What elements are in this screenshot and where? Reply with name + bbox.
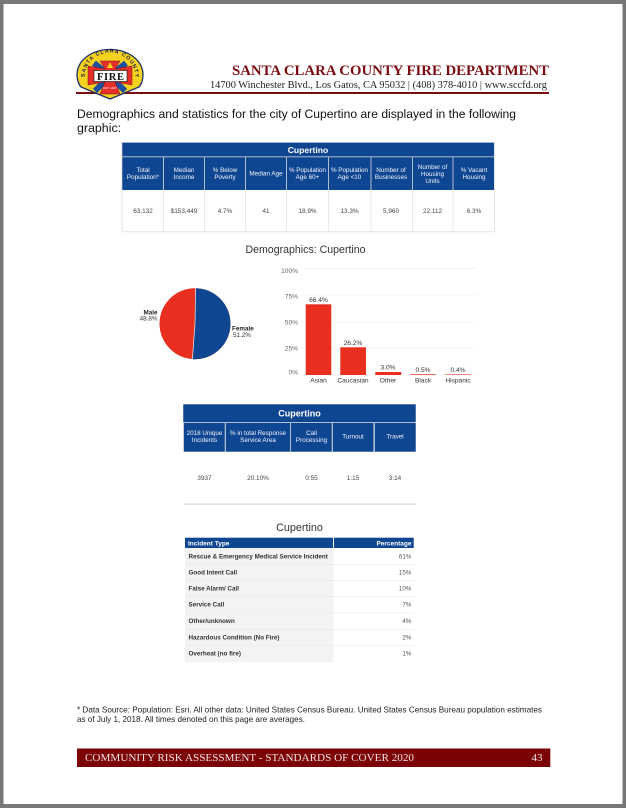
text: intro paragraph	[77, 107, 516, 135]
bar chart: race and ethnicity: 50%	[285, 320, 298, 326]
table: city statistics: Median Age	[249, 170, 283, 178]
table: response times: 3937	[197, 475, 212, 482]
table: city statistics: Median	[174, 167, 195, 174]
table: response times	[183, 404, 416, 505]
table: response times: 2018 Unique	[187, 430, 223, 437]
icon: fire department logo: SANTA CLARA COUNTY	[81, 48, 140, 77]
bar chart: race and ethnicity: 0.5%	[415, 367, 431, 374]
bar chart: race and ethnicity: 66.4%	[309, 297, 328, 304]
header rule	[76, 92, 549, 94]
bar chart: race and ethnicity: 25%	[285, 346, 298, 352]
pie chart: gender: 48.8%	[140, 316, 158, 322]
table: city statistics: Housing	[462, 174, 486, 181]
bar chart: race and ethnicity: Hispanic	[445, 378, 471, 384]
table: city statistics	[122, 142, 494, 232]
table: city statistics: Units	[425, 178, 440, 185]
table: city statistics: Cupertino	[288, 145, 328, 155]
table: city statistics: 6.3%	[467, 208, 482, 215]
table: response times: Turnout	[342, 434, 364, 440]
table: response times: Incidents	[192, 437, 217, 444]
table: city statistics: Number of	[376, 167, 406, 174]
text: department address: 14700 Winchester Blvd., Los Gatos, CA 95032 | (408) 378-4010 | www.sccfd.org	[210, 79, 548, 91]
table: city statistics: Poverty	[214, 174, 237, 181]
table: incident types: Good Intent Call	[188, 570, 237, 577]
table: city statistics: Number of	[418, 164, 447, 171]
table: incident types: Incident Type	[188, 540, 230, 547]
table: city statistics: 13.3%	[340, 208, 359, 215]
table: city statistics: Housing	[421, 171, 445, 178]
table: city statistics: Age <10	[338, 174, 362, 181]
footer banner: COMMUNITY RISK ASSESSMENT - STANDARDS OF COVER 2020	[85, 752, 414, 764]
table: city statistics: % Vacant	[461, 167, 487, 174]
footer banner: 43	[532, 752, 543, 764]
bar chart: race and ethnicity: 0%	[288, 370, 298, 376]
table: city statistics: 63,132	[133, 208, 153, 215]
text: intro paragraph: graphic:	[77, 121, 121, 135]
text: intro paragraph: Demographics and statistics for the city of Cupertino are displayed in the following	[77, 107, 516, 121]
table: response times: Call	[306, 430, 317, 437]
table: city statistics: Population*	[127, 174, 160, 181]
table: incident types: Rescue & Emergency Medical Service Incident	[188, 554, 329, 561]
table: response times: 3:14	[389, 475, 402, 482]
table: incident types: 7%	[402, 602, 412, 609]
bar chart: race and ethnicity: Caucasian	[337, 378, 369, 384]
table: city statistics: $153,449	[171, 208, 198, 215]
footer banner	[77, 748, 550, 767]
bar chart: race and ethnicity: 75%	[285, 294, 298, 300]
table: incident types: Hazardous Condition (No Fire)	[188, 634, 279, 641]
table: response times: Travel	[386, 434, 404, 440]
table: response times: 20.10%	[247, 475, 269, 482]
heading: incident types: Cupertino	[276, 522, 323, 534]
table: response times: Service Area	[240, 437, 276, 444]
bar chart: race and ethnicity: 100%	[281, 268, 298, 275]
bar chart: race and ethnicity: 0.4%	[450, 367, 466, 374]
pie chart: gender: 51.2%	[233, 332, 251, 339]
table: city statistics: Businesses	[375, 174, 407, 181]
table: incident types: 4%	[402, 618, 412, 625]
table: incident types	[185, 538, 414, 662]
table: city statistics: 4.7%	[218, 208, 233, 215]
table: city statistics: 18.9%	[298, 208, 317, 215]
table: response times: Cupertino	[278, 408, 321, 418]
table: incident types: Service Call	[188, 602, 224, 609]
table: city statistics: 41	[262, 208, 270, 215]
table: incident types: 15%	[399, 570, 412, 577]
table: city statistics: % Population	[331, 167, 369, 174]
table: city statistics: Income	[174, 174, 195, 181]
text: data source footnote: as of July 1, 2018. All times denoted on this page are averages.	[77, 715, 305, 724]
icon: fire department logo	[76, 48, 144, 100]
pie chart: gender	[140, 288, 254, 359]
bar chart: race and ethnicity: 3.0%	[380, 364, 396, 372]
heading: department name: SANTA CLARA COUNTY FIRE DEPARTMENT	[232, 63, 549, 79]
table: incident types: Other/unknown	[188, 618, 235, 625]
table: city statistics: 22,112	[423, 208, 442, 215]
table: response times: 0:55	[305, 475, 318, 482]
table: response times: 1:15	[347, 475, 360, 482]
bar chart: race and ethnicity	[281, 268, 476, 384]
table: incident types: 2%	[402, 634, 412, 641]
table: city statistics: Age 60+	[296, 174, 320, 181]
icon: fire department logo: FIRE	[97, 72, 124, 83]
table: incident types: False Alarm/ Call	[188, 586, 239, 593]
table: incident types: Percentage	[376, 540, 412, 547]
table: city statistics: 5,960	[383, 208, 399, 215]
text: data source footnote	[77, 706, 542, 724]
icon: fire department logo: EST. 1947	[103, 86, 117, 90]
text: data source footnote: * Data Source: Population: Esri. All other data: United States Census Bureau. United States Census Bureau population estimates	[77, 706, 542, 714]
bar chart: race and ethnicity: 26.2%	[344, 340, 362, 347]
table: response times: % in total Response	[230, 430, 286, 437]
table: incident types: Overheat (no fire)	[188, 650, 241, 658]
heading: demographics: Demographics: Cupertino	[245, 244, 366, 256]
table: response times: Processing	[296, 437, 328, 444]
bar chart: race and ethnicity: Black	[415, 378, 432, 384]
bar chart: race and ethnicity: Other	[380, 378, 397, 384]
table: city statistics: Total	[136, 167, 150, 174]
bar chart: race and ethnicity: Asian	[310, 378, 327, 384]
pie chart: gender: Female	[232, 326, 254, 332]
table: incident types: 61%	[399, 554, 412, 561]
table: city statistics: % Population	[289, 167, 327, 174]
pie chart: gender: Male	[144, 310, 158, 316]
table: city statistics: % Below	[213, 167, 238, 174]
table: incident types: 10%	[399, 586, 412, 593]
table: incident types: 1%	[402, 650, 412, 658]
